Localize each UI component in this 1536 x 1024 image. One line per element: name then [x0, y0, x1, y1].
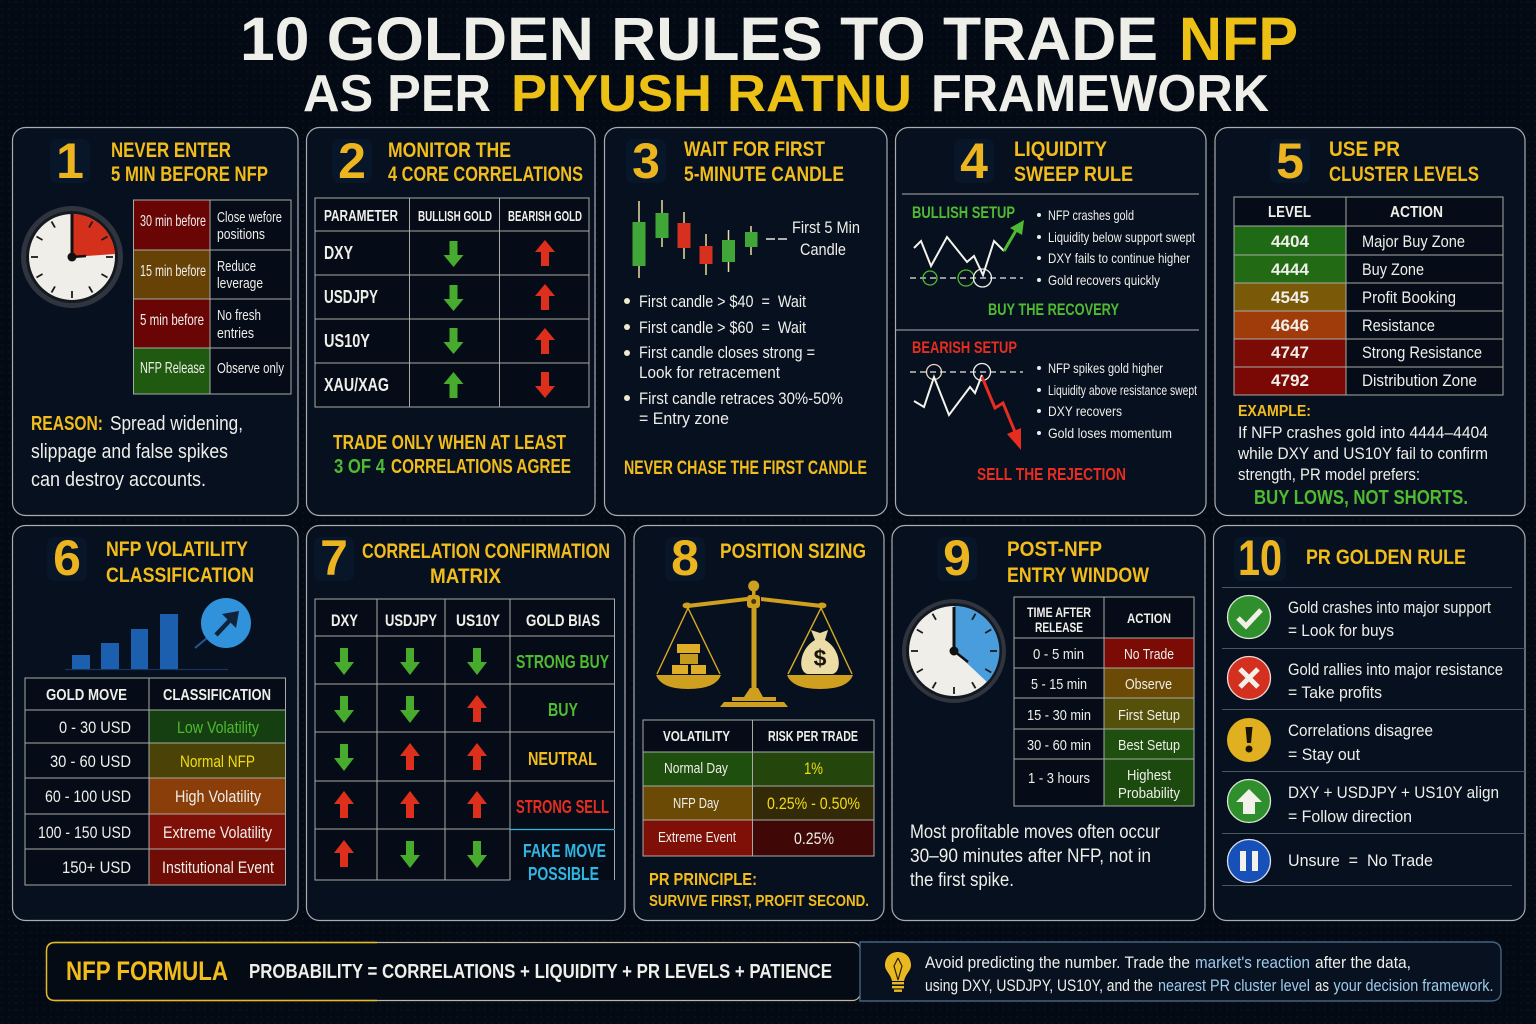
correlation callout	[333, 432, 571, 478]
entry window note: 30–90 minutes after NFP, not in	[910, 846, 1151, 867]
heading 6: NFP VOLATILITY	[106, 537, 248, 561]
heading 3: 5-MINUTE CANDLE	[684, 162, 844, 186]
correlation table: XAU/XAG	[324, 375, 389, 395]
PR principle	[649, 869, 869, 910]
timing table: 15 min before	[140, 263, 206, 280]
number badge 4	[954, 133, 994, 189]
number badge 2: 2	[338, 133, 366, 189]
panel: rule 5 PR cluster levels	[1215, 128, 1525, 516]
candlestick chart: First 5 Min	[792, 218, 860, 237]
bullish setup: NFP crashes gold	[1048, 207, 1134, 223]
correlation table	[315, 198, 589, 407]
panel: rule 2 core correlations	[306, 128, 595, 516]
timing table	[134, 200, 291, 394]
heading 9	[1007, 537, 1150, 587]
entry window table: 30 - 60 min	[1027, 737, 1091, 754]
position size table: 0.25%	[794, 829, 834, 848]
correlation table: BULLISH GOLD	[418, 208, 492, 225]
correlation table: DXY	[324, 243, 353, 263]
panel: rule 9 post-NFP entry window	[892, 526, 1205, 920]
timing table: leverage	[217, 275, 263, 292]
heading 9: POST-NFP	[1007, 537, 1102, 561]
rule: resistance take profits: Gold rallies into major resistance	[1288, 660, 1503, 679]
NFP formula bar: NFP FORMULA	[66, 956, 228, 986]
number badge 7	[314, 530, 354, 586]
advice box: Avoid predicting the number. Trade the	[925, 953, 1190, 972]
timing table: 30 min before	[140, 213, 206, 230]
title	[240, 5, 1298, 123]
NFP formula bar: PROBABILITY = CORRELATIONS + LIQUIDITY + PR LEVELS + PATIENCE	[249, 961, 832, 983]
timing table: Close wefore	[217, 209, 282, 226]
cluster level table: Strong Resistance	[1362, 344, 1482, 362]
entry window table: TIME AFTER	[1027, 604, 1091, 620]
heading 7: MATRIX	[430, 564, 502, 588]
bearish setup: SELL THE REJECTION	[977, 464, 1126, 484]
entry window table: RELEASE	[1035, 619, 1083, 635]
volatility table: GOLD MOVE	[46, 687, 127, 704]
number badge 2	[332, 133, 372, 189]
cluster level table: 4545	[1271, 288, 1309, 307]
entry window table: ACTION	[1127, 610, 1171, 626]
confirmation matrix: STRONG BUY	[516, 652, 609, 672]
timing table: entries	[217, 325, 254, 342]
cluster level table: LEVEL	[1268, 204, 1311, 221]
panel: rule 7 correlation matrix	[306, 526, 625, 920]
cluster level table: ACTION	[1390, 204, 1443, 221]
advice box: after the data,	[1315, 953, 1411, 972]
cluster level table: 4404	[1271, 232, 1310, 251]
panel: rule 8 position sizing	[634, 526, 884, 920]
confirmation matrix: STRONG SELL	[516, 797, 609, 817]
bullish setup: BULLISH SETUP	[912, 204, 1015, 222]
heading 10: PR GOLDEN RULE	[1306, 545, 1466, 569]
volatility table: 150+ USD	[62, 858, 131, 877]
rule: support look for buys: = Look for buys	[1288, 621, 1394, 640]
confirmation matrix: NEUTRAL	[528, 749, 597, 769]
bearish setup: Gold loses momentum	[1048, 425, 1172, 441]
reason text	[31, 413, 243, 491]
title: NFP	[1179, 5, 1298, 73]
icon: golden balance scales: $	[814, 645, 827, 671]
correlation table: US10Y	[324, 331, 370, 351]
bearish setup: BEARISH SETUP	[912, 339, 1017, 357]
example text: EXAMPLE:	[1238, 403, 1311, 420]
volatility table: 60 - 100 USD	[45, 787, 131, 806]
candle bullet list: First candle > $40 = Wait	[639, 292, 806, 311]
rule: correlations disagree	[1227, 718, 1433, 764]
volatility table: Low Volatility	[177, 718, 259, 737]
confirmation matrix: DXY	[331, 611, 358, 630]
entry window note: the first spike.	[910, 870, 1014, 891]
candle bullet list: First candle > $60 = Wait	[639, 318, 806, 337]
bullish setup: Liquidity below support swept	[1048, 229, 1195, 245]
title: FRAMEWORK	[931, 65, 1269, 123]
bullish setup: BUY THE RECOVERY	[988, 300, 1119, 319]
number badge 6: 6	[53, 530, 81, 586]
title: AS PER	[303, 65, 491, 123]
volatility table: 0 - 30 USD	[59, 718, 131, 737]
example text: strength, PR model prefers:	[1238, 466, 1420, 484]
panel: rule 1 never enter before NFP	[12, 128, 298, 516]
confirmation matrix: US10Y	[456, 611, 501, 630]
entry window table: 0 - 5 min	[1033, 646, 1084, 663]
number badge 8: 8	[671, 530, 699, 586]
cluster level table	[1234, 197, 1503, 395]
number badge 9: 9	[943, 530, 971, 586]
cluster level table: Resistance	[1362, 317, 1435, 335]
candle bullet list: First candle retraces 30%-50%	[639, 389, 843, 408]
volatility table: Extreme Volatility	[163, 823, 272, 842]
bullish setup	[910, 204, 1195, 319]
heading 1: 5 MIN BEFORE NFP	[111, 162, 268, 186]
number badge 5	[1270, 133, 1310, 189]
number badge 6	[47, 530, 87, 586]
correlation callout: 3 OF 4	[334, 456, 386, 478]
heading 5: USE PR	[1329, 137, 1400, 161]
number badge 7: 7	[320, 530, 348, 586]
rule: alignment follow direction: DXY + USDJPY + US10Y align	[1288, 783, 1499, 802]
cluster level table: 4747	[1271, 343, 1309, 362]
correlation table: BEARISH GOLD	[508, 208, 582, 225]
number badge 3	[626, 133, 666, 189]
advice box: using DXY, USDJPY, US10Y, and the	[925, 976, 1153, 995]
timing table: Reduce	[217, 258, 256, 275]
number badge 1: 1	[56, 133, 84, 189]
rule: unsure no trade: Unsure = No Trade	[1288, 851, 1433, 870]
rule: resistance take profits	[1228, 656, 1503, 702]
candlestick chart	[632, 200, 860, 278]
cluster level table: 4792	[1271, 371, 1309, 390]
icon: clock with blue wedge	[902, 599, 1006, 703]
panel: rule 3 first candle	[604, 128, 887, 516]
entry window table: Probability	[1118, 785, 1180, 802]
bearish setup	[910, 339, 1197, 484]
heading 2	[388, 138, 583, 186]
volatility table: 30 - 60 USD	[50, 752, 131, 771]
timing table: Observe only	[217, 360, 284, 377]
entry window table: Observe	[1125, 676, 1172, 693]
reason text: can destroy accounts.	[31, 469, 206, 491]
candle bullet list: Look for retracement	[639, 363, 780, 382]
heading 4	[1014, 137, 1133, 186]
confirmation matrix: POSSIBLE	[528, 864, 599, 884]
cluster level table: Major Buy Zone	[1362, 233, 1465, 251]
title: 10 GOLDEN RULES TO TRADE	[240, 5, 1158, 73]
entry window table: 15 - 30 min	[1027, 707, 1091, 724]
volatility table: Normal NFP	[180, 752, 255, 771]
number badge 8	[665, 530, 705, 586]
position size table: Normal Day	[664, 760, 728, 777]
confirmation matrix: FAKE MOVE	[523, 841, 606, 861]
icon: golden balance scales	[656, 580, 853, 707]
confirmation matrix: BUY	[548, 700, 578, 720]
example text: If NFP crashes gold into 4444–4404	[1238, 424, 1488, 442]
number badge 10: 10	[1238, 530, 1282, 586]
timing table: No fresh	[217, 307, 261, 324]
rule: resistance take profits: = Take profits	[1288, 683, 1382, 702]
number badge 1	[50, 133, 90, 189]
timing table: positions	[217, 226, 265, 243]
PR principle: PR PRINCIPLE:	[649, 869, 757, 889]
position size table: RISK PER TRADE	[768, 729, 858, 745]
heading 2: 4 CORE CORRELATIONS	[388, 162, 583, 186]
panel: rule 4 liquidity sweep	[896, 128, 1206, 516]
reason text: Spread widening,	[110, 413, 243, 435]
candle bullet list: = Entry zone	[639, 409, 729, 428]
PR principle: SURVIVE FIRST, PROFIT SECOND.	[649, 893, 869, 910]
volatility table: Institutional Event	[162, 858, 274, 877]
heading 1: NEVER ENTER	[111, 138, 231, 162]
correlation table: USDJPY	[324, 287, 378, 307]
number badge 5: 5	[1276, 133, 1304, 189]
timing table: NFP Release	[140, 360, 205, 377]
volatility table: CLASSIFICATION	[163, 687, 271, 704]
entry window table: 1 - 3 hours	[1028, 770, 1090, 787]
candle bullet list	[624, 292, 843, 428]
number badge 9	[937, 530, 977, 586]
cluster level table: Buy Zone	[1362, 261, 1424, 279]
entry window table: No Trade	[1124, 646, 1174, 663]
heading 3: WAIT FOR FIRST	[684, 137, 825, 161]
heading 7: CORRELATION CONFIRMATION	[362, 539, 610, 563]
volatility table: High Volatility	[175, 787, 261, 806]
volatility table: 100 - 150 USD	[38, 823, 131, 842]
bullish setup: DXY fails to continue higher	[1048, 250, 1190, 266]
volatility table	[25, 678, 286, 885]
cluster level table: 4646	[1271, 316, 1309, 335]
number badge 3: 3	[632, 133, 660, 189]
entry window note	[910, 822, 1161, 891]
cluster level table: Distribution Zone	[1362, 372, 1477, 390]
NFP formula bar	[46, 942, 860, 1000]
confirmation matrix	[315, 599, 614, 884]
position size table: VOLATILITY	[663, 729, 730, 745]
heading 2: MONITOR THE	[388, 138, 511, 162]
advice box: market's reaction	[1195, 953, 1310, 972]
bearish setup: NFP spikes gold higher	[1048, 360, 1163, 376]
rule: support look for buys	[1228, 596, 1491, 640]
position size table	[643, 720, 874, 856]
rule: support look for buys: Gold crashes into major support	[1288, 598, 1491, 617]
heading 3	[684, 137, 844, 186]
heading 1	[111, 138, 268, 186]
entry window table: First Setup	[1118, 707, 1180, 724]
heading 7	[362, 539, 610, 588]
bearish setup: Liquidity above resistance swept	[1048, 382, 1197, 398]
correlation callout: CORRELATIONS AGREE	[391, 456, 571, 478]
cluster level table: Profit Booking	[1362, 289, 1456, 307]
advice box: your decision framework.	[1334, 976, 1494, 995]
entry window table	[1014, 597, 1194, 806]
position size table: Extreme Event	[658, 829, 737, 846]
heading 6: CLASSIFICATION	[106, 563, 254, 587]
advice box: nearest PR cluster level	[1158, 976, 1310, 995]
position size table: NFP Day	[673, 795, 719, 812]
heading 6	[106, 537, 254, 587]
icon: bar chart with arrow badge	[65, 598, 251, 670]
timing table: 5 min before	[140, 312, 204, 329]
advice box	[860, 942, 1501, 1001]
reason text: slippage and false spikes	[31, 441, 228, 463]
rule: correlations disagree: Correlations disagree	[1288, 721, 1433, 740]
candle bullet list: First candle closes strong =	[639, 343, 815, 362]
candle callout: NEVER CHASE THE FIRST CANDLE	[624, 457, 867, 479]
confirmation matrix: GOLD BIAS	[526, 611, 600, 630]
heading 5: CLUSTER LEVELS	[1329, 162, 1479, 186]
position size table: 1%	[804, 759, 823, 778]
rule: unsure no trade	[1228, 840, 1433, 882]
correlation callout: TRADE ONLY WHEN AT LEAST	[333, 432, 566, 454]
entry window table: Highest	[1127, 767, 1172, 784]
icon: clock with red wedge	[21, 206, 123, 308]
example text	[1237, 403, 1488, 509]
reason text: REASON:	[31, 413, 103, 435]
title: PIYUSH RATNU	[511, 65, 912, 123]
correlation table: PARAMETER	[324, 208, 398, 225]
heading 8: POSITION SIZING	[720, 539, 866, 563]
rule: alignment follow direction	[1228, 780, 1499, 826]
rule: correlations disagree: = Stay out	[1288, 745, 1360, 764]
confirmation matrix: USDJPY	[385, 611, 438, 630]
icon: light bulb	[885, 952, 911, 992]
position size table: 0.25% - 0.50%	[767, 794, 860, 813]
advice box: as	[1315, 976, 1329, 995]
panel: rule 6 volatility classification	[12, 526, 298, 920]
entry window note: Most profitable moves often occur	[910, 822, 1161, 843]
rule: alignment follow direction: = Follow direction	[1288, 807, 1412, 826]
entry window table: 5 - 15 min	[1031, 676, 1087, 693]
entry window table: Best Setup	[1118, 737, 1180, 754]
bearish setup: DXY recovers	[1048, 403, 1122, 419]
bullish setup: Gold recovers quickly	[1048, 272, 1160, 288]
example text: BUY LOWS, NOT SHORTS.	[1254, 487, 1468, 509]
heading 5	[1329, 137, 1479, 186]
heading 4: LIQUIDITY	[1014, 137, 1107, 161]
heading 9: ENTRY WINDOW	[1007, 563, 1150, 587]
heading 4: SWEEP RULE	[1014, 162, 1133, 186]
candlestick chart: Candle	[800, 240, 846, 259]
number badge 4: 4	[960, 133, 988, 189]
example text: while DXY and US10Y fail to confirm	[1237, 445, 1488, 463]
panel: rule 10 golden rule	[1214, 526, 1525, 920]
cluster level table: 4444	[1271, 260, 1310, 279]
